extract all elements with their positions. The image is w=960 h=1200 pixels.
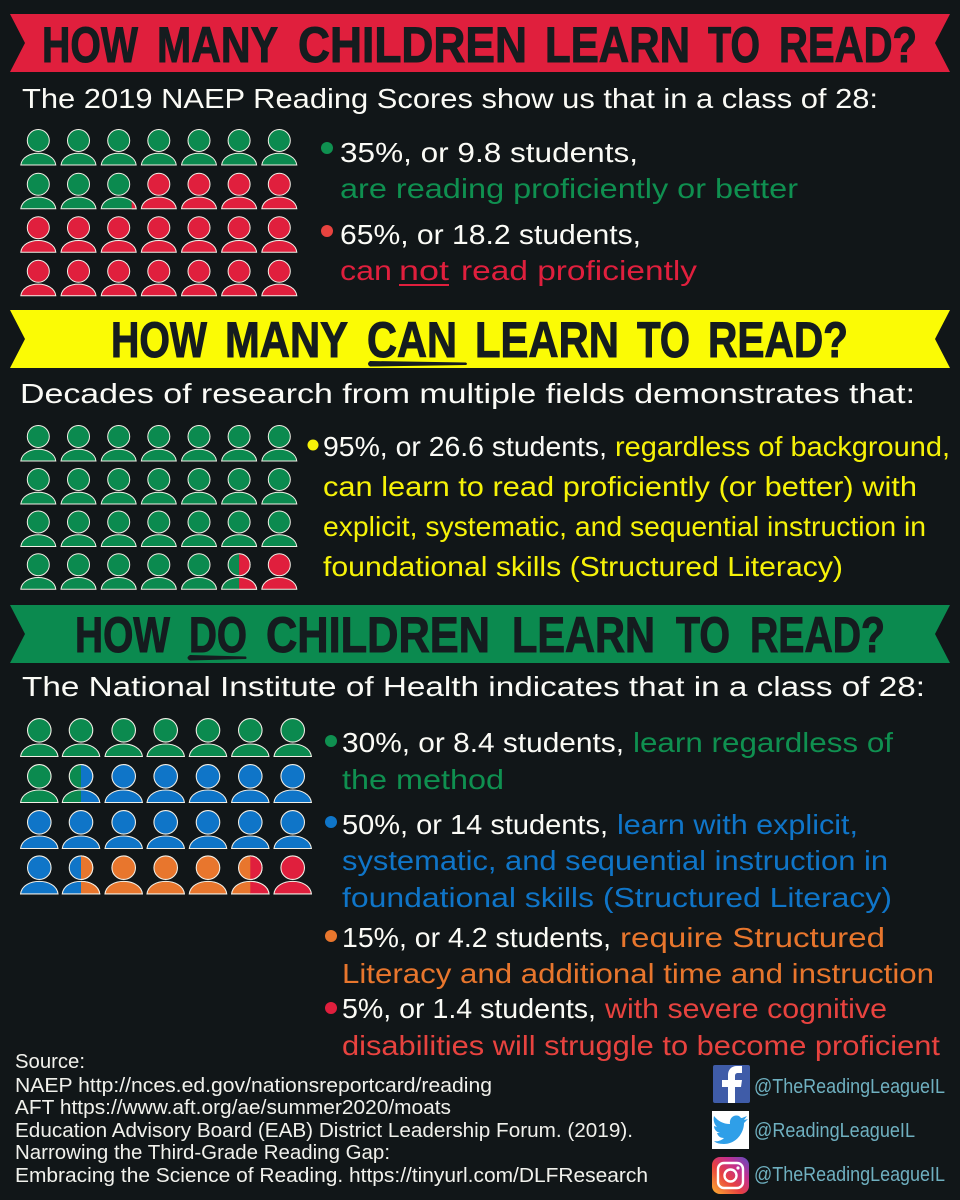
text block: 15 percent additional time: Literacy and additional time and instruction <box>342 958 934 989</box>
title: how do children learn to read: CHILDREN <box>266 607 490 663</box>
text block: 65 percent not proficient: 65%, or 18.2 students, <box>340 219 641 250</box>
text block: 95 percent can learn: regardless of background, <box>615 431 950 462</box>
heading: decades of research: Decades of research from multiple fields demonstrates that: <box>20 378 915 409</box>
text block: 5 percent severe cognitive disabilities: with severe cognitive <box>604 993 887 1024</box>
title: how do children learn to read: LEARN <box>512 607 655 663</box>
text block: 50 percent structured literacy <box>325 809 892 913</box>
title: how many children learn to read: LEARN <box>545 17 690 73</box>
title: how many children learn to read: HOW <box>42 17 139 73</box>
title: how do children learn to read: DO <box>189 607 247 663</box>
text block: 35 percent proficient: 35%, or 9.8 students, <box>340 137 638 168</box>
text block: 30 percent learn regardless: the method <box>342 764 504 795</box>
text block: 15 percent additional time <box>325 922 934 989</box>
text block: 95 percent can learn: can learn to read proficiently (or better) with <box>323 471 917 502</box>
pictogram: class of 28, 95 percent can learn <box>21 426 297 589</box>
title: how many children learn to read <box>42 17 917 73</box>
text block: 65 percent not proficient: not <box>399 255 449 286</box>
text block: 35 percent proficient: are reading proficiently or better <box>340 173 798 204</box>
heading: national institute of health: The National Institute of Health indicates that in a class of 28: <box>22 671 925 702</box>
text block: 5 percent severe cognitive disabilities: disabilities will struggle to become proficient <box>342 1030 940 1061</box>
banner: how many children learn to read <box>10 14 950 73</box>
text block: 15 percent additional time: require Structured <box>620 922 885 953</box>
text block: 50 percent structured literacy: systematic, and sequential instruction in <box>342 845 888 876</box>
title: how do children learn to read: TO <box>676 607 730 663</box>
title: how many can learn to read: CAN <box>367 312 457 368</box>
title: how many can learn to read: LEARN <box>475 312 619 368</box>
text block: 95 percent can learn: foundational skills (Structured Literacy) <box>323 551 843 582</box>
source list: Embracing the Science of Reading. https://tinyurl.com/DLFResearch <box>15 1165 648 1187</box>
title: how many can learn to read: READ? <box>708 312 848 368</box>
text block: 50 percent structured literacy: learn with explicit, <box>617 809 858 840</box>
title: how do children learn to read: READ? <box>750 607 885 663</box>
source list: NAEP http://nces.ed.gov/nationsreportcard/reading <box>15 1075 492 1097</box>
text block: 35 percent proficient <box>321 137 798 204</box>
icon: facebook <box>713 1065 750 1103</box>
title: how many children learn to read: TO <box>708 17 760 73</box>
handle: twitter: @ReadingLeagueIL <box>754 1120 915 1142</box>
text block: 50 percent structured literacy: foundational skills (Structured Literacy) <box>342 882 892 913</box>
title: how many children learn to read: READ? <box>779 17 917 73</box>
text block: 95 percent can learn: explicit, systematic, and sequential instruction in <box>323 511 926 542</box>
text block: 5 percent severe cognitive disabilities: 5%, or 1.4 students, <box>342 993 596 1024</box>
title: how many can learn to read: TO <box>637 312 690 368</box>
text block: 30 percent learn regardless: learn regardless of <box>633 727 893 758</box>
pictogram: class of 28, 35 percent proficient <box>21 130 297 296</box>
title: how many can learn to read <box>111 312 848 368</box>
title: how do children learn to read <box>75 607 885 663</box>
text block: 30 percent learn regardless <box>325 727 893 795</box>
source list: Narrowing the Third-Grade Reading Gap: <box>15 1142 390 1164</box>
source list: Education Advisory Board (EAB) District Leadership Forum. (2019). <box>15 1120 633 1142</box>
title: how many children learn to read: CHILDREN <box>298 17 527 73</box>
text block: 65 percent not proficient <box>321 219 697 286</box>
text block: 15 percent additional time: 15%, or 4.2 students, <box>342 922 611 953</box>
title: how do children learn to read: HOW <box>75 607 171 663</box>
source list: AFT https://www.aft.org/ae/summer2020/moats <box>15 1097 451 1119</box>
title: how many children learn to read: MANY <box>157 17 278 73</box>
heading: NAEP reading scores: The 2019 NAEP Reading Scores show us that in a class of 28: <box>22 83 878 114</box>
icon: instagram <box>712 1157 749 1194</box>
title: how many can learn to read: MANY <box>225 312 348 368</box>
text block: 65 percent not proficient: can <box>340 255 392 286</box>
text block: 5 percent severe cognitive disabilities <box>325 993 940 1061</box>
text block: 50 percent structured literacy: 50%, or 14 students, <box>342 809 608 840</box>
text block: 30 percent learn regardless: 30%, or 8.4 students, <box>342 727 624 758</box>
source list: Source: <box>15 1051 85 1073</box>
pictogram: class of 28, how children learn <box>21 719 311 894</box>
text block: 95 percent can learn <box>308 431 950 582</box>
text block: 65 percent not proficient: read proficiently <box>461 255 697 286</box>
icon: twitter <box>712 1111 749 1149</box>
banner: how many can learn to read <box>10 310 950 368</box>
title: how many can learn to read: HOW <box>111 312 208 368</box>
banner: how do children learn to read <box>10 605 950 663</box>
source list <box>15 1051 648 1187</box>
text block: 95 percent can learn: 95%, or 26.6 students, <box>323 431 607 462</box>
